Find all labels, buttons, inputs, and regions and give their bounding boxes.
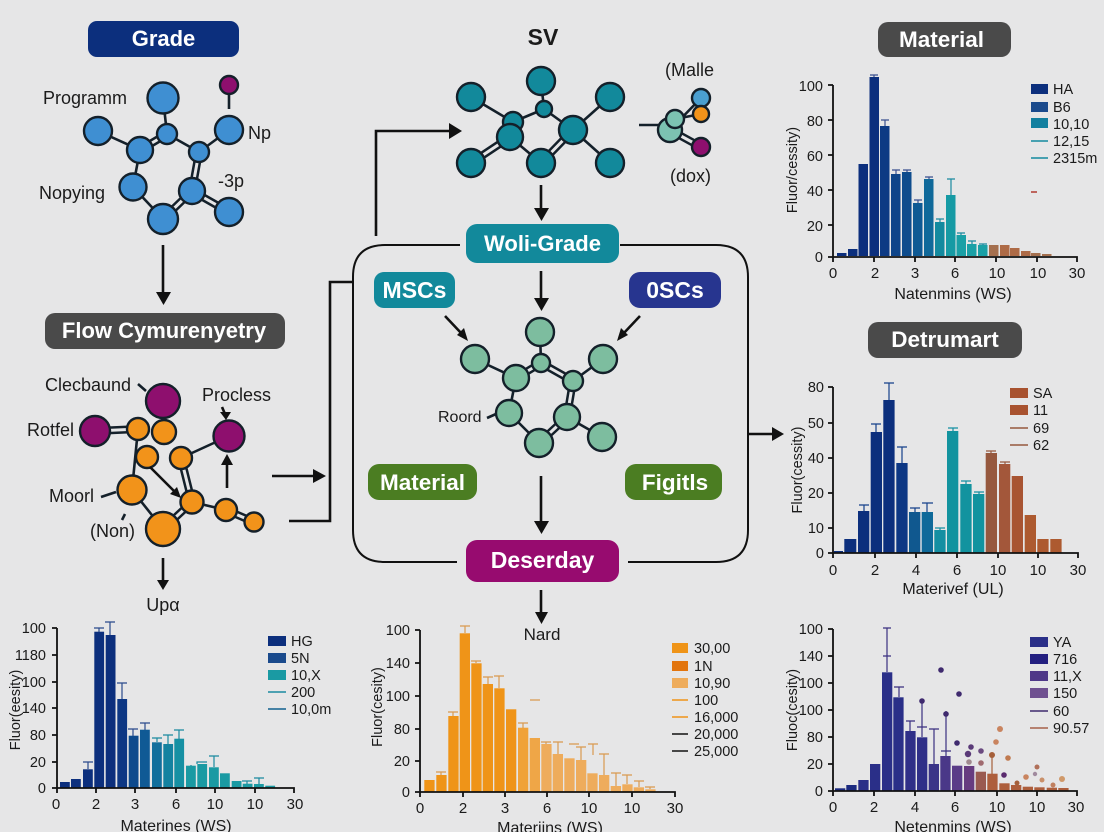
bar chart: bottom right with scatter dots: 4 <box>911 799 919 816</box>
bar chart: bottom right with scatter dots: 20 <box>807 757 823 773</box>
bar chart: bottom right with scatter dots: 100 <box>799 622 823 638</box>
pill: OSCs <box>629 272 721 308</box>
bar chart: bottom right with scatter dots: 0 <box>815 784 823 800</box>
bar chart: bottom left: 100 <box>22 621 46 637</box>
bar chart: bottom center: 20 <box>394 754 410 770</box>
bar chart: bottom right with scatter dots: 0 <box>829 799 837 816</box>
pill: MSCs <box>374 272 455 308</box>
connector arrow: to teal network <box>376 123 462 236</box>
bar chart: top right <box>785 75 1097 303</box>
bar chart: bottom left: 100 <box>22 675 46 691</box>
heading pill: Material <box>878 22 1011 57</box>
molecule labels: blue network: -3p <box>218 171 244 191</box>
bar chart: top right: 2 <box>871 265 879 282</box>
bar chart: bottom center: 6 <box>543 800 551 817</box>
bar chart: top right: 10 <box>1030 265 1046 282</box>
small molecule labels: (dox) <box>670 166 711 186</box>
bar chart: top right: HA <box>1053 82 1073 98</box>
bar chart: bottom left: 200 <box>291 685 315 701</box>
bar chart: bottom right with scatter dots: 10 <box>989 799 1005 816</box>
bar chart: bottom left: 6 <box>172 796 180 813</box>
bar chart: top right: Natenmins (WS) <box>894 286 1012 303</box>
heading: SV: SV <box>528 24 559 50</box>
pill: Deserday: Deserday <box>491 547 594 573</box>
bar chart: top right: 10,10 <box>1053 117 1089 133</box>
bar chart: middle right: 2 <box>871 562 879 579</box>
arrow: OSCs to green network <box>617 316 640 341</box>
bar chart: bottom left: 5N <box>291 651 310 667</box>
bar chart: bottom left <box>8 621 331 832</box>
small molecule labels: (Malle <box>665 60 714 80</box>
bar chart: bottom left: 3 <box>131 796 139 813</box>
pill: Figitls <box>625 464 722 500</box>
arrow: MSCs to green network <box>445 316 468 341</box>
bar chart: bottom center: 3 <box>501 800 509 817</box>
bar chart: bottom center: 0 <box>416 800 424 817</box>
bar chart: bottom right with scatter dots: 60 <box>1053 704 1069 720</box>
bar chart: middle right: Materivef (UL) <box>902 581 1004 598</box>
bar chart: bottom center: 100 <box>386 689 410 705</box>
bar chart: middle right: 11 <box>1033 403 1048 419</box>
heading pill: Detrumart: Detrumart <box>891 327 999 352</box>
bar chart: bottom left: 2 <box>92 796 100 813</box>
bar chart: bottom right with scatter dots: Fluoc(cesity) <box>785 669 801 751</box>
bar chart: bottom left: 140 <box>22 701 46 717</box>
bar chart: top right: 30 <box>1069 265 1085 282</box>
bar chart: bottom right with scatter dots: 30 <box>1068 799 1084 816</box>
bar chart: top right: 12,15 <box>1053 134 1089 150</box>
panel: workflow frame <box>353 224 748 562</box>
bar chart: bottom right with scatter dots <box>785 622 1089 832</box>
pill: Wold-Grade <box>466 224 619 263</box>
bar chart: middle right <box>790 380 1086 598</box>
bar chart: bottom center: Fluor(cesity) <box>370 667 386 747</box>
bar chart: bottom right with scatter dots: 2 <box>870 799 878 816</box>
connector: orange network to panel <box>289 282 352 521</box>
bar chart: bottom right with scatter dots: YA <box>1053 635 1072 651</box>
bar chart: middle right: 69 <box>1033 421 1049 437</box>
molecule labels: blue network <box>39 88 271 203</box>
bar chart: middle right: 30 <box>1070 562 1086 579</box>
label: Upa: Upα <box>146 595 180 615</box>
bar chart: bottom center: 10 <box>581 800 597 817</box>
heading pill: Grade: Grade <box>132 26 195 51</box>
bar chart: middle right: 40 <box>808 451 824 467</box>
bar chart: bottom left: 0 <box>52 796 60 813</box>
molecule labels: orange network: Rotfel <box>27 420 74 440</box>
heading pill: Detrumart <box>868 322 1022 358</box>
label: Roord: Roord <box>438 409 482 426</box>
molecule labels: blue network: Programm <box>43 88 127 108</box>
heading pill: Material: Material <box>899 27 984 52</box>
bar chart: bottom right with scatter dots: 11,X <box>1053 669 1082 685</box>
molecule: teal network <box>457 67 624 177</box>
bar chart: top right: 0 <box>815 250 823 266</box>
bar chart: middle right: 62 <box>1033 438 1049 454</box>
molecule labels: orange network: Moorl <box>49 486 94 506</box>
bar chart: bottom center: 100 <box>694 693 718 709</box>
bar chart: top right: 60 <box>807 149 823 165</box>
molecule labels: orange network: (Non) <box>90 521 135 541</box>
bar chart: bottom center: 0 <box>402 785 410 801</box>
bar chart: middle right: 0 <box>816 546 824 562</box>
bar chart: bottom center: 80 <box>394 722 410 738</box>
bar chart: bottom center: 16,000 <box>694 710 738 726</box>
bar chart: middle right: Fluor(cessity) <box>790 426 806 514</box>
bar chart: top right: Fluor/cessity) <box>785 127 801 213</box>
arrow: green network to Deserday <box>534 476 549 534</box>
molecule: orange and purple network <box>80 384 264 546</box>
bar chart: top right: 6 <box>951 265 959 282</box>
bar chart: middle right: 10 <box>1030 562 1046 579</box>
pill: Deserday <box>466 540 619 582</box>
bar chart: top right: B6 <box>1053 100 1071 116</box>
bar chart: bottom center <box>370 623 738 832</box>
label: Nard: Nard <box>524 625 560 644</box>
pill: Material green: Material <box>380 470 465 495</box>
bar chart: top right: 10 <box>989 265 1005 282</box>
heading pill: Grade <box>88 21 239 57</box>
bar chart: middle right: 0 <box>829 562 837 579</box>
bar chart: top right: 3 <box>911 265 919 282</box>
bar chart: bottom right with scatter dots: 6 <box>951 799 959 816</box>
small molecule labels <box>665 60 714 186</box>
molecule labels: blue network: Np <box>248 123 271 143</box>
pill: Material green <box>368 464 477 500</box>
arrow: Wold-Grade to green network <box>534 271 549 311</box>
bar chart: top right: 0 <box>829 265 837 282</box>
arrow: Grade to Flow <box>156 245 171 305</box>
bar chart: middle right: SA <box>1033 386 1053 402</box>
arrow: panel to right charts <box>748 427 784 441</box>
bar chart: middle right: 4 <box>912 562 920 579</box>
bar chart: middle right: 10 <box>808 521 824 537</box>
molecule labels: orange network: Clecbaund <box>45 375 131 395</box>
bar chart: bottom right with scatter dots: 100 <box>799 703 823 719</box>
bar chart: bottom left: 10,X <box>291 668 321 684</box>
bar chart: bottom center: 100 <box>386 623 410 639</box>
bar chart: bottom right with scatter dots: 10 <box>1029 799 1045 816</box>
pill: Wold-Grade: Woli-Grade <box>484 231 601 256</box>
bar chart: middle right: 80 <box>808 380 824 396</box>
bar chart: bottom left: 10,0m <box>291 702 331 718</box>
bar chart: middle right: 6 <box>953 562 961 579</box>
arrow: orange network to center <box>272 469 326 483</box>
bar chart: bottom center: 1N <box>694 659 713 675</box>
molecule labels: orange network: Procless <box>202 385 271 405</box>
pill: OSCs: 0SCs <box>646 277 704 303</box>
bar chart: top right: 40 <box>807 184 823 200</box>
bar chart: bottom center: 30,00 <box>694 641 730 657</box>
bar chart: top right: 80 <box>807 114 823 130</box>
bar chart: bottom left: 10 <box>247 796 263 813</box>
bar chart: bottom center: 25,000 <box>694 744 738 760</box>
bar chart: bottom left: 20 <box>30 755 46 771</box>
heading pill: Flow Cymurenyetry <box>45 313 285 349</box>
bar chart: top right: 100 <box>799 79 823 95</box>
bar chart: bottom left: 10 <box>207 796 223 813</box>
bar chart: bottom center: 20,000 <box>694 727 738 743</box>
arrow: Deserday to Nard <box>535 590 548 624</box>
small molecule <box>639 89 710 156</box>
bar chart: top right: 20 <box>807 219 823 235</box>
bar chart: bottom center: 140 <box>386 656 410 672</box>
bar chart: bottom right with scatter dots: 100 <box>799 676 823 692</box>
bar chart: bottom right with scatter dots: 716 <box>1053 652 1077 668</box>
bar chart: bottom center: 10,90 <box>694 676 730 692</box>
arrow: Flow to chart <box>157 558 169 590</box>
bar chart: bottom right with scatter dots: 140 <box>799 649 823 665</box>
arrow: teal network to Wold-Grade <box>534 185 549 221</box>
bar chart: middle right: 10 <box>990 562 1006 579</box>
heading pill: Flow Cymurenyetry: Flow Cymurenyetry <box>62 318 267 343</box>
bar chart: bottom left: 80 <box>30 728 46 744</box>
molecule labels: blue network: Nopying <box>39 183 105 203</box>
bar chart: bottom left: HG <box>291 634 313 650</box>
bar chart: bottom right with scatter dots: 80 <box>807 730 823 746</box>
bar chart: bottom left: 30 <box>287 796 303 813</box>
bar chart: bottom right with scatter dots: 90.57 <box>1053 721 1089 737</box>
bar chart: bottom center: 10 <box>624 800 640 817</box>
bar chart: bottom center: 2 <box>459 800 467 817</box>
bar chart: bottom center: 30 <box>667 800 683 817</box>
molecule: blue network <box>84 76 243 234</box>
bar chart: bottom left: 0 <box>38 781 46 797</box>
bar chart: bottom left: 1180 <box>15 648 46 664</box>
pill: Figitls: Figitls <box>642 470 708 495</box>
molecule labels: orange network <box>27 375 271 541</box>
bar chart: middle right: 50 <box>808 416 824 432</box>
pill: MSCs: MSCs <box>383 277 446 303</box>
bar chart: middle right: 20 <box>808 486 824 502</box>
bar chart: top right: 2315m <box>1053 151 1097 167</box>
bar chart: bottom left: Fluor(eesity) <box>8 670 24 750</box>
molecule: green network <box>461 318 617 457</box>
bar chart: bottom right with scatter dots: 150 <box>1053 686 1077 702</box>
